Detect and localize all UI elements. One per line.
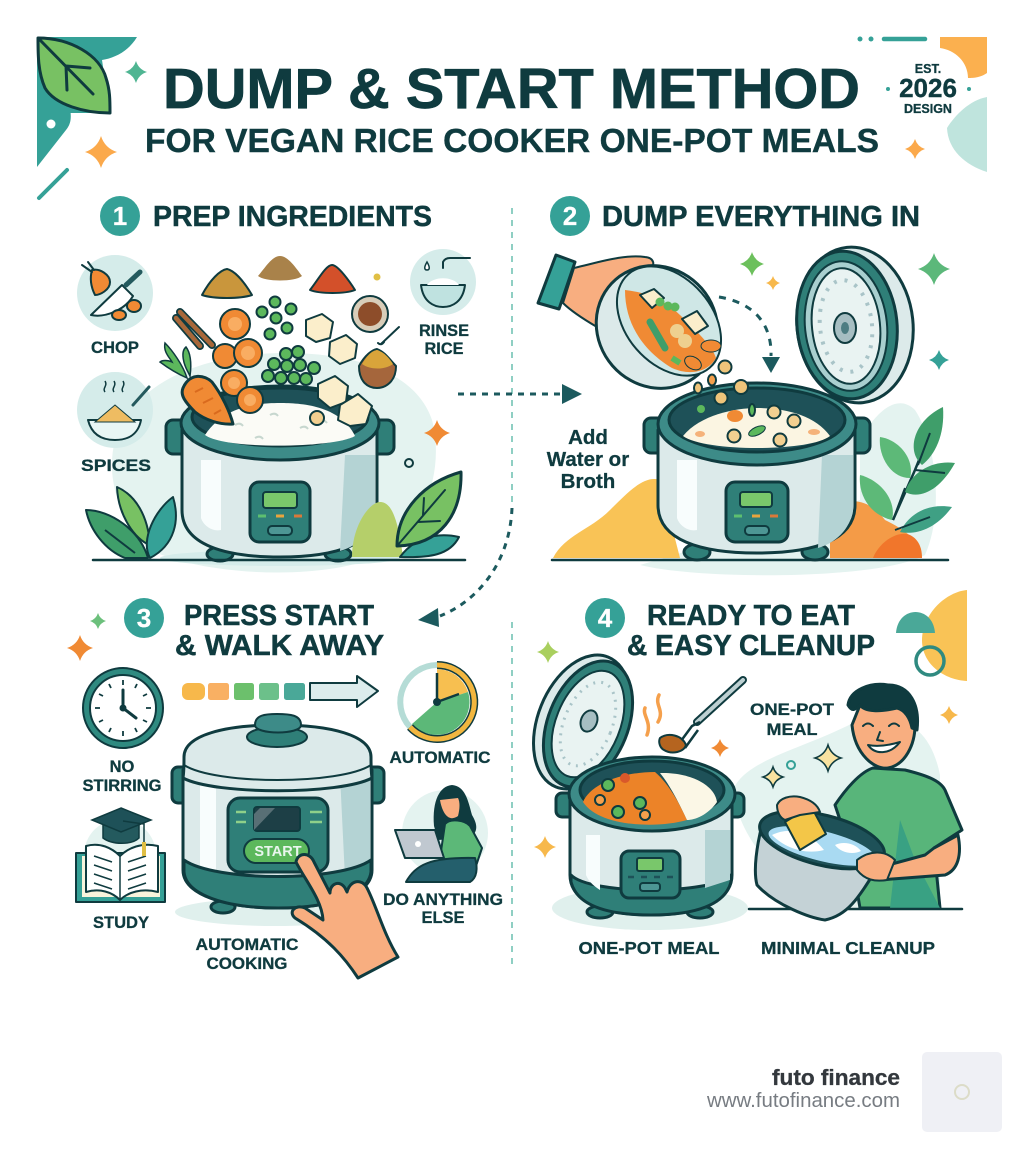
leaves and sparkles (552, 252, 955, 560)
rice cooker 4 (556, 757, 744, 918)
icon: timer (400, 665, 474, 739)
step 3 heading: PRESS START (184, 600, 374, 632)
footer: brand (706, 1065, 900, 1112)
label: study: STUDY (93, 914, 149, 932)
step 2 heading: 2 (563, 201, 577, 231)
rice cooker 1 (160, 386, 400, 566)
step 1 heading: PREP INGREDIENTS (153, 201, 432, 233)
panel 4: ready to eat and easy cleanup (515, 590, 967, 958)
header badge: est. 2026 design (858, 36, 987, 172)
header decoration: left leaf corner (37, 37, 147, 198)
header badge: est. 2026 design: EST. (915, 62, 941, 76)
title: FOR VEGAN RICE COOKER ONE-POT MEALS (145, 122, 879, 159)
step 3 heading (124, 598, 384, 662)
header badge: est. 2026 design: 2026 (899, 73, 957, 103)
leaves (86, 472, 465, 560)
step 4 heading: & EASY CLEANUP (627, 630, 875, 662)
pot with water and sponge (749, 745, 962, 920)
label: chop: CHOP (91, 339, 139, 357)
label: add water or broth: Add (568, 426, 608, 449)
bowl with food (571, 241, 743, 413)
label: rinse rice (419, 322, 469, 358)
label: no stirring (82, 758, 162, 795)
label: do anything else: DO ANYTHING (383, 891, 503, 909)
panel 3: press start and walk away (67, 598, 503, 978)
background shapes (640, 403, 936, 575)
background blob (112, 353, 436, 572)
background blob (733, 719, 940, 908)
header badge: est. 2026 design: DESIGN (904, 102, 952, 116)
icon: chop (77, 255, 153, 331)
icon: clock (83, 668, 163, 748)
label: one-pot meal (top): MEAL (766, 721, 818, 739)
label: add water or broth: Water or (547, 448, 629, 471)
top right decoration (896, 590, 967, 681)
label: do anything else: ELSE (421, 909, 465, 927)
panel 2: dump everything in (538, 196, 955, 575)
panel 1: prep ingredients (77, 196, 476, 572)
step 4 heading: 4 (598, 603, 613, 633)
sparkles (67, 613, 106, 661)
label: add water or broth: Broth (561, 470, 615, 493)
label: spices: SPICES (81, 457, 151, 475)
step 1 heading (100, 196, 432, 236)
label: automatic cooking (196, 936, 299, 973)
icon: rinse rice (410, 249, 476, 315)
label: no stirring: NO (110, 758, 135, 776)
icon: person with laptop (395, 785, 488, 882)
carrot (160, 343, 233, 424)
label: minimal cleanup: MINIMAL CLEANUP (761, 938, 935, 958)
label: automatic cooking: AUTOMATIC (196, 936, 299, 954)
arrow: step 2 to step 3 (418, 508, 512, 627)
fork with food (644, 680, 743, 757)
icon: spices bowl (77, 372, 153, 448)
step 3 heading: & WALK AWAY (175, 630, 384, 662)
arrow: step 1 to step 2 (458, 384, 582, 404)
label: automatic: AUTOMATIC (390, 749, 491, 767)
step 2 heading (550, 196, 920, 236)
footer: brand: www.futofinance.com (706, 1090, 900, 1112)
rice cooker 3: START (254, 844, 302, 860)
label: no stirring: STIRRING (82, 777, 162, 795)
label: do anything else (383, 891, 503, 927)
label: add water or broth (547, 426, 629, 493)
label: automatic cooking: COOKING (206, 955, 288, 973)
falling ingredients (176, 256, 450, 467)
rice cooker 2 (644, 383, 870, 560)
label: one-pot meal (top) (750, 701, 834, 739)
falling chickpeas (694, 360, 748, 404)
label: rinse rice: RINSE (419, 322, 469, 340)
step 4 heading: READY TO EAT (647, 600, 855, 632)
label: one-pot meal (bottom): ONE-POT MEAL (578, 938, 720, 958)
center divider vertical (511, 208, 513, 965)
step 3 heading: 3 (137, 603, 151, 633)
footer: logo box (922, 1052, 1002, 1132)
step 1 heading: 1 (113, 201, 127, 231)
label: rinse rice: RICE (424, 340, 464, 358)
title (145, 57, 879, 159)
hand pouring (538, 255, 653, 327)
step 4 heading (585, 598, 875, 662)
open lid 4 (515, 641, 650, 803)
progress bar with arrow (182, 676, 378, 707)
footer: brand: futo finance (772, 1065, 900, 1090)
person washing pot (835, 684, 962, 908)
icon: book with graduation cap (76, 808, 165, 902)
rice cooker 3 (172, 714, 384, 926)
hand pressing start (292, 854, 398, 978)
open lid (789, 241, 921, 409)
title: DUMP & START METHOD (163, 57, 860, 121)
sparkles panel 4 (534, 641, 958, 858)
step 2 heading: DUMP EVERYTHING IN (602, 201, 920, 233)
dashed arrow (719, 297, 780, 373)
label: one-pot meal (top): ONE-POT (750, 701, 834, 719)
